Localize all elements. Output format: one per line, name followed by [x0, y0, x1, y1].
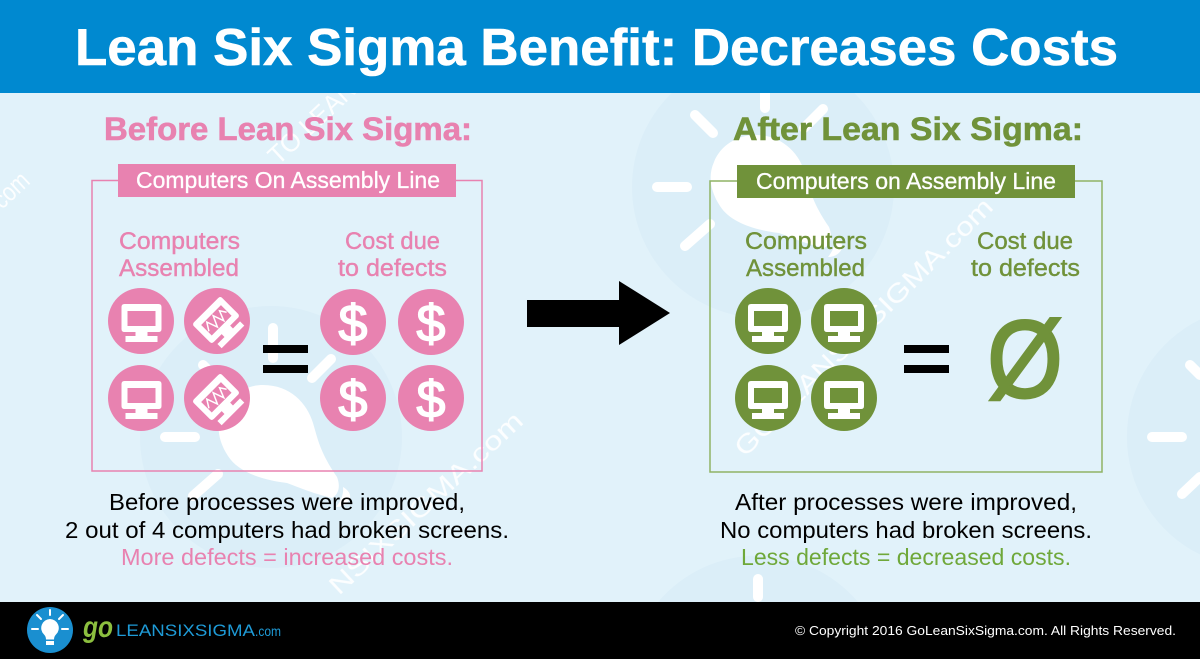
column heading: computers assembled	[745, 228, 867, 282]
diagonal site watermarks: GOLEANSIXSIGMA.com	[728, 191, 999, 462]
icon: working computer	[735, 365, 801, 431]
icon: broken computer	[184, 365, 250, 431]
logo wordmark: go	[82, 611, 113, 644]
after caption	[720, 489, 1092, 570]
background lightbulb watermark: upper right	[632, 56, 894, 318]
after box label	[737, 165, 1075, 198]
before caption	[65, 489, 509, 570]
icon: working computer	[108, 365, 174, 431]
column heading: computers assembled: Assembled	[746, 255, 865, 282]
logo wordmark	[82, 611, 281, 644]
icon: working computer	[811, 365, 877, 431]
icon: dollar: $	[339, 371, 368, 429]
panel: before lean six sigma	[65, 111, 509, 570]
copyright: © Copyright 2016 GoLeanSixSigma.com. All Rights Reserved.	[795, 623, 1176, 638]
before caption: More defects = increased costs.	[121, 544, 453, 570]
after box label: Computers on Assembly Line	[756, 168, 1056, 194]
icon: dollar	[320, 289, 386, 355]
panel: after lean six sigma	[710, 111, 1102, 570]
column heading: cost due to defects: to defects	[338, 255, 447, 282]
before box outline	[92, 180, 482, 471]
column heading: computers assembled: Computers	[745, 228, 867, 255]
icon: dollar	[398, 289, 464, 355]
column heading: computers assembled	[119, 228, 240, 282]
equals sign	[263, 345, 308, 373]
before heading: Before Lean Six Sigma:	[104, 111, 472, 147]
after box outline	[710, 181, 1102, 472]
diagonal site watermarks: TO LEAN	[262, 73, 363, 170]
diagonal site watermarks	[0, 73, 999, 600]
background lightbulb watermark: lower left	[140, 306, 402, 568]
arrow	[527, 281, 670, 345]
diagonal site watermarks: NSIXSIGMA.com	[323, 405, 529, 600]
icon: working computer	[811, 288, 877, 354]
column heading: cost due to defects: Cost due	[977, 228, 1073, 255]
column heading: cost due to defects	[338, 228, 447, 282]
column heading: cost due to defects	[971, 228, 1080, 282]
column heading: computers assembled: Computers	[119, 228, 240, 255]
icon: dollar	[398, 365, 464, 431]
icon: dollar: $	[417, 295, 446, 353]
background lightbulb watermark: right edge	[1127, 320, 1200, 554]
background lightbulb watermark: bottom	[658, 556, 858, 602]
column heading: cost due to defects: to defects	[971, 255, 1080, 282]
equals sign	[904, 345, 949, 373]
icon: dollar: $	[417, 371, 446, 429]
logo wordmark: LEANSIXSIGMA	[116, 621, 256, 640]
after caption: Less defects = decreased costs.	[741, 544, 1071, 570]
after caption: After processes were improved,	[735, 489, 1077, 515]
after heading: After Lean Six Sigma:	[733, 111, 1083, 147]
header band	[0, 0, 1200, 93]
before caption: Before processes were improved,	[109, 489, 465, 515]
before box label: Computers On Assembly Line	[136, 167, 440, 193]
footer band	[0, 602, 1200, 659]
after caption: No computers had broken screens.	[720, 517, 1092, 543]
zero cost symbol: Ø	[987, 297, 1063, 420]
icon: logo lightbulb	[27, 607, 73, 653]
icon: working computer	[735, 288, 801, 354]
icon: dollar: $	[339, 295, 368, 353]
icon: working computer	[108, 288, 174, 354]
column heading: cost due to defects: Cost due	[345, 228, 440, 255]
logo wordmark: .com	[255, 623, 281, 639]
title: Lean Six Sigma Benefit: Decreases Costs	[75, 19, 1118, 77]
column heading: computers assembled: Assembled	[119, 255, 239, 282]
before caption: 2 out of 4 computers had broken screens.	[65, 517, 509, 543]
icon: dollar	[320, 365, 386, 431]
icon: broken computer	[184, 288, 250, 354]
